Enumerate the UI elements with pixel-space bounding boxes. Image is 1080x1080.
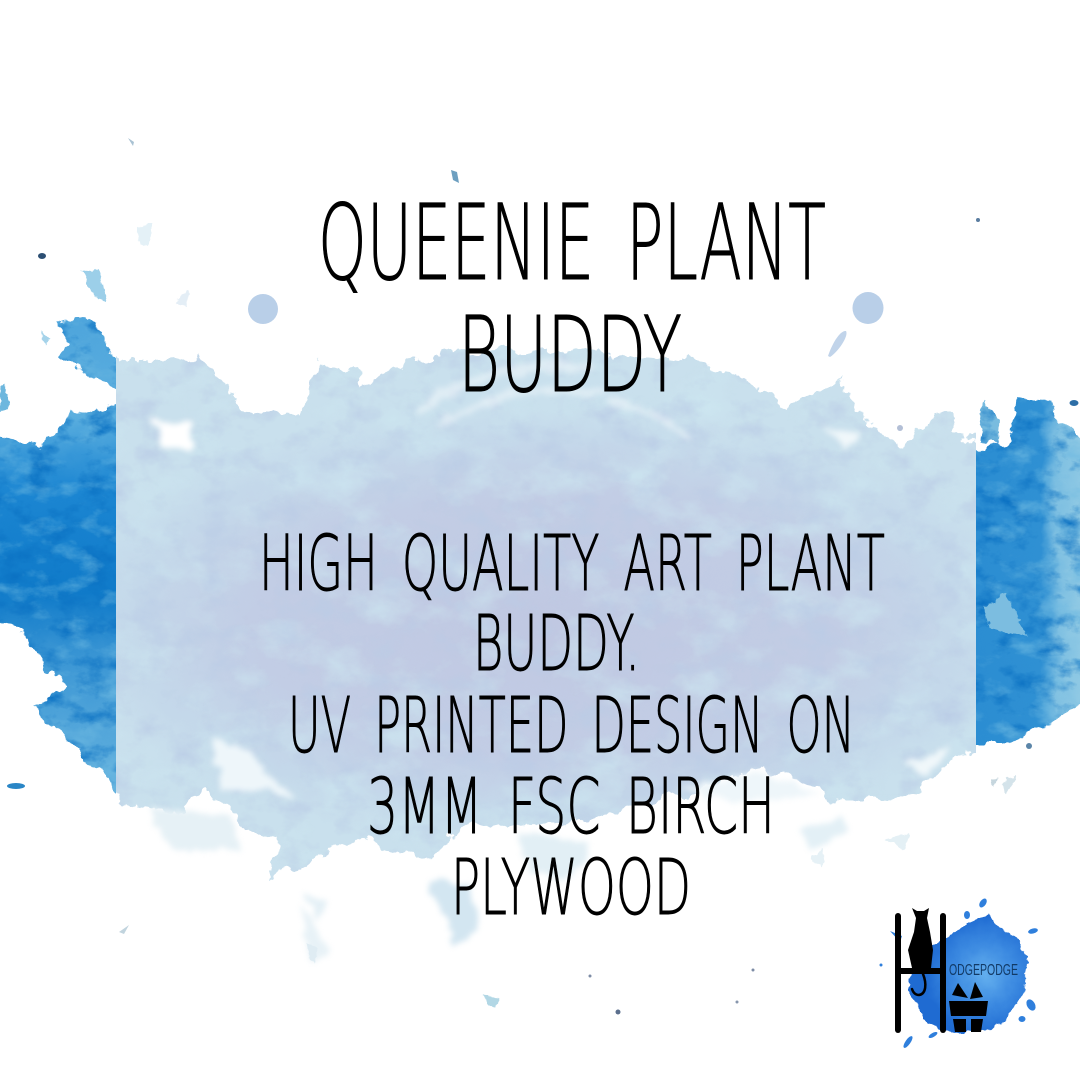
- logo cat tail: [912, 974, 925, 995]
- title: BUDDY: [458, 294, 682, 416]
- watercolour splash: left saturated: [0, 317, 116, 794]
- logo gift: [949, 982, 988, 1032]
- pale fragments below splash: [150, 810, 850, 960]
- watercolour splash: right saturated: [976, 397, 1080, 746]
- description text: [259, 520, 885, 933]
- description text: BUDDY.: [473, 600, 640, 689]
- title: [318, 182, 826, 416]
- brush arcs: [420, 366, 690, 440]
- watercolour splash: pale centre: [100, 350, 990, 960]
- logo blue splat: [880, 897, 1038, 1049]
- logo cat: [908, 908, 933, 968]
- logo letter H: [895, 913, 946, 1033]
- description text: 3MM FSC BIRCH: [367, 763, 775, 852]
- description text: PLYWOOD: [451, 844, 691, 933]
- white gaps in the splash: [150, 418, 950, 802]
- logo: Hodgepodge: [880, 897, 1038, 1049]
- logo word: ODGEPODGE: [949, 962, 1018, 979]
